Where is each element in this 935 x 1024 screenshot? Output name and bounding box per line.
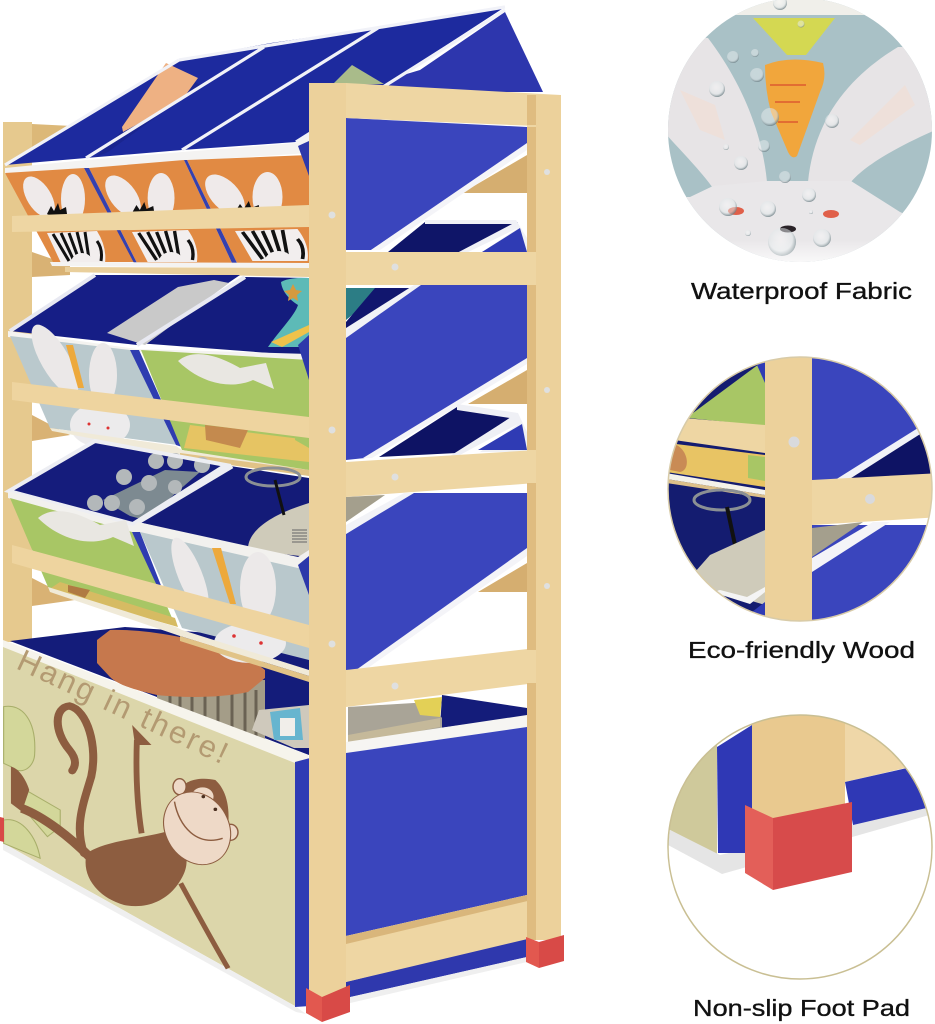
top tier rims: [5, 7, 505, 165]
rabbit right ear: [808, 47, 935, 182]
toy: gray knob roller: [87, 453, 210, 520]
bottom bin front panel: [3, 645, 295, 1006]
bottom bin contents: [348, 695, 527, 745]
leaves: [4, 706, 35, 771]
lower tier left face: [10, 498, 175, 625]
ear blush: [680, 90, 725, 140]
carrot: [765, 59, 824, 157]
monkey illustration: [4, 706, 242, 968]
top tier bin face 1: [5, 168, 134, 262]
red foot pad rear: [0, 817, 4, 842]
detail circle: non-slip foot pad: [667, 714, 933, 980]
light wood rail: [845, 724, 905, 782]
bottom bin side strip: [295, 758, 310, 1007]
toy: orange pouf: [97, 630, 265, 750]
blue fabric left: [717, 725, 752, 853]
monkey arm: [136, 740, 142, 833]
toy: small game boxes: [252, 705, 309, 748]
water droplets: [709, 0, 839, 256]
wood post: [752, 716, 845, 818]
bottom large bin: [3, 640, 310, 1014]
right post: [527, 95, 561, 940]
wood rails on right: [346, 83, 561, 982]
label: waterproof fabric: Waterproof Fabric: [691, 278, 912, 304]
bottom bin rim: [346, 715, 527, 753]
bottom bin interior and contents: [10, 627, 309, 755]
bottom bin interior: [10, 627, 309, 755]
top tier bin face 3: [187, 155, 309, 263]
red pad: [745, 805, 773, 890]
fish print lower: [38, 511, 134, 546]
middle tier interiors: [10, 275, 240, 345]
zebra print 2: [98, 170, 197, 262]
cream panel: [670, 746, 717, 854]
monkey front leg: [181, 883, 228, 968]
fish print: [178, 354, 274, 389]
red foot pad left: [306, 985, 350, 1022]
post: [765, 350, 812, 640]
top tier wood strut: [65, 267, 309, 277]
yellow print: [670, 444, 765, 487]
label: non-slip foot pad: Non-slip Foot Pad: [693, 995, 910, 1021]
bottom bin side panel: [346, 727, 527, 936]
lower tier interiors: [10, 442, 225, 525]
zebra print 3: [197, 169, 308, 261]
toy: peach block: [122, 63, 198, 132]
middle tier right face: [141, 350, 309, 472]
top tier bin face 2: [89, 160, 232, 263]
middle rail 2: [12, 382, 309, 438]
third tier rear bin: [379, 407, 514, 457]
monkey tail: [58, 706, 93, 853]
second tier rear bin: [388, 222, 518, 252]
dark teal toy behind post: [346, 288, 385, 320]
toy: teal plush: [268, 278, 309, 347]
label: eco-friendly wood: Eco-friendly Wood: [688, 637, 915, 663]
monkey back leg: [22, 808, 89, 857]
middle tier bins: [8, 275, 309, 476]
rabbit left ear: [668, 38, 767, 186]
side panel lower: [346, 493, 527, 670]
strip under middle tier: [180, 453, 309, 476]
back frame of shelf: [3, 122, 527, 642]
side panel top: [346, 118, 527, 250]
wood rail left: [678, 418, 765, 453]
green fabric: [690, 366, 765, 425]
side panel middle: [346, 285, 527, 460]
middle tier left face: [10, 336, 178, 445]
top tier bin interiors: [5, 7, 505, 165]
lower blue fabric: [812, 525, 926, 620]
rabbit eyes and nose: [728, 207, 744, 215]
detail circle: waterproof fabric: [655, 0, 935, 270]
carrot leaves: [753, 18, 835, 55]
blue fabric right: [845, 768, 926, 825]
lower tier bins: [8, 441, 309, 682]
red foot pad right: [526, 935, 564, 968]
rabbit face: [686, 181, 902, 262]
zebra print 1: [17, 171, 105, 263]
toy: ride-on machine: [246, 468, 309, 557]
toy: green block: [332, 65, 384, 85]
top tier bins: [5, 7, 543, 268]
monkey body: [86, 830, 187, 906]
front left post: [309, 83, 346, 1003]
toy: gray pillow: [107, 280, 229, 345]
lower rail 3: [12, 545, 309, 648]
rail screws: [392, 264, 398, 690]
top rail: [12, 205, 309, 232]
machine: [695, 530, 765, 605]
lower tier right face: [140, 532, 309, 660]
white base strip: [668, 805, 935, 874]
steering wheel: [694, 490, 750, 510]
right blue fabric: [812, 358, 917, 480]
detail circle: eco-friendly wood: [667, 356, 933, 622]
gray toy behind rail: [346, 495, 385, 522]
right side panels: [346, 118, 527, 1004]
wood rail right: [812, 473, 935, 525]
bin lettering: Hang in there!: [12, 643, 233, 771]
top tier outer side panel: [346, 12, 543, 92]
monkey head: [182, 779, 229, 827]
white and wood strip: [669, 474, 765, 495]
bottom blue strip: [346, 937, 527, 998]
